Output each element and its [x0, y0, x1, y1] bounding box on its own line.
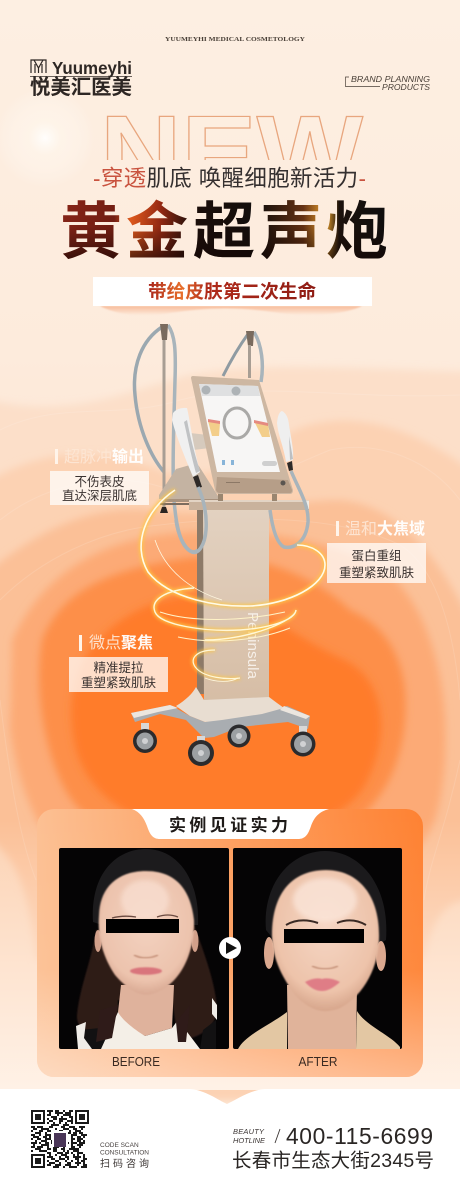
- beige shirt: [238, 1011, 400, 1049]
- callout: pulse output: 直达深层肌底: [62, 488, 137, 503]
- callout: micro focus: 重塑紧致肌肤: [81, 675, 156, 690]
- device wheels: [133, 723, 316, 766]
- nose: [312, 966, 338, 969]
- jacket: [80, 1020, 216, 1049]
- light flare: [0, 88, 95, 188]
- headband: [93, 849, 198, 925]
- device left handpiece: [172, 408, 202, 488]
- QR code: [31, 1110, 89, 1168]
- hotline: HOTLINE: [233, 1136, 266, 1145]
- ears: [94, 930, 102, 952]
- neck: [118, 985, 174, 1036]
- main title: 黄金超声炮: [60, 181, 388, 271]
- hair strand: [96, 1005, 190, 1042]
- golden energy rings: [141, 490, 325, 681]
- scan consultation text: [100, 1142, 152, 1170]
- callout: large focal zone: 温和大焦域: [345, 519, 425, 538]
- headband: [266, 851, 386, 945]
- face: [272, 870, 379, 1011]
- callout: large focal zone: [327, 519, 426, 583]
- callout: micro focus: 精准提拉: [93, 660, 144, 675]
- device shelf: [189, 500, 309, 510]
- before photo: [59, 848, 229, 1049]
- panel: case results: [37, 809, 423, 1077]
- after photo: [233, 848, 402, 1049]
- header tagline: YUUMEYHI MEDICAL COSMETOLOGY: [165, 37, 306, 43]
- white top: [101, 1012, 200, 1049]
- section tab: 实例见证实力: [169, 815, 291, 835]
- callout: large focal zone: 重塑紧致肌肤: [339, 565, 414, 580]
- device base: [131, 687, 310, 738]
- device rear panel: [159, 463, 218, 499]
- device right handpiece: [277, 411, 293, 471]
- brand planning note: PRODUCTS: [382, 82, 430, 92]
- device column: [197, 506, 204, 694]
- address: 长春市生态大街2345号: [232, 1150, 434, 1172]
- before label: BEFORE: [112, 1055, 160, 1069]
- product: ultrasound device: [131, 324, 316, 766]
- device cables back: [134, 327, 164, 472]
- callout: micro focus: [69, 633, 168, 692]
- scan consultation text: 扫码咨询: [100, 1157, 152, 1170]
- hotline: 400-115-6699: [286, 1123, 433, 1149]
- ears: [264, 937, 274, 969]
- scan consultation text: CONSULTATION: [100, 1150, 149, 1156]
- brows: [112, 915, 178, 918]
- section tab: [132, 809, 329, 839]
- nose: [134, 955, 158, 958]
- logo wordmark: Yuumeyhi: [52, 58, 132, 78]
- hotline: BEAUTY: [233, 1127, 265, 1136]
- brand planning note: [346, 74, 430, 92]
- subtitle: -穿透肌底 唤醒细胞新活力-: [93, 166, 366, 191]
- outlined NEW heading: NEW: [100, 95, 364, 211]
- lips: [130, 967, 162, 975]
- brows: [286, 920, 366, 925]
- face: [99, 871, 194, 995]
- main title: 黄金超声炮: [60, 181, 388, 271]
- privacy bar: [106, 919, 179, 933]
- play icon: [219, 937, 241, 959]
- callout: pulse output: [50, 447, 149, 505]
- scan consultation text: CODE SCAN: [100, 1142, 139, 1149]
- contour lines: [0, 391, 460, 900]
- ribbon banner: 带给皮肤第二次生命: [148, 281, 316, 302]
- footer white band: [0, 1089, 460, 1183]
- logo icon: [31, 60, 46, 73]
- background: orange topographic contours: [0, 367, 460, 1100]
- device pole: [162, 332, 166, 507]
- callout: large focal zone: 蛋白重组: [351, 548, 402, 563]
- callout: pulse output: 不伤表皮: [74, 475, 125, 489]
- device handpiece arm: [190, 433, 210, 450]
- callout: micro focus: 微点聚焦: [89, 633, 153, 652]
- brand planning note: BRAND PLANNING: [351, 74, 430, 84]
- logo: [30, 58, 132, 99]
- hair: [77, 925, 217, 1040]
- after label: AFTER: [298, 1055, 338, 1069]
- device cables front: [176, 487, 206, 553]
- device screen: [191, 376, 293, 494]
- device brand lettering: Peninsula: [244, 612, 260, 680]
- privacy bar: [284, 929, 364, 943]
- ribbon banner: [93, 277, 372, 315]
- neck and chest: [287, 985, 357, 1049]
- lips: [305, 978, 340, 991]
- logo Chinese name: 悦美汇医美: [30, 76, 132, 99]
- callout: pulse output: 超脉冲输出: [64, 447, 144, 466]
